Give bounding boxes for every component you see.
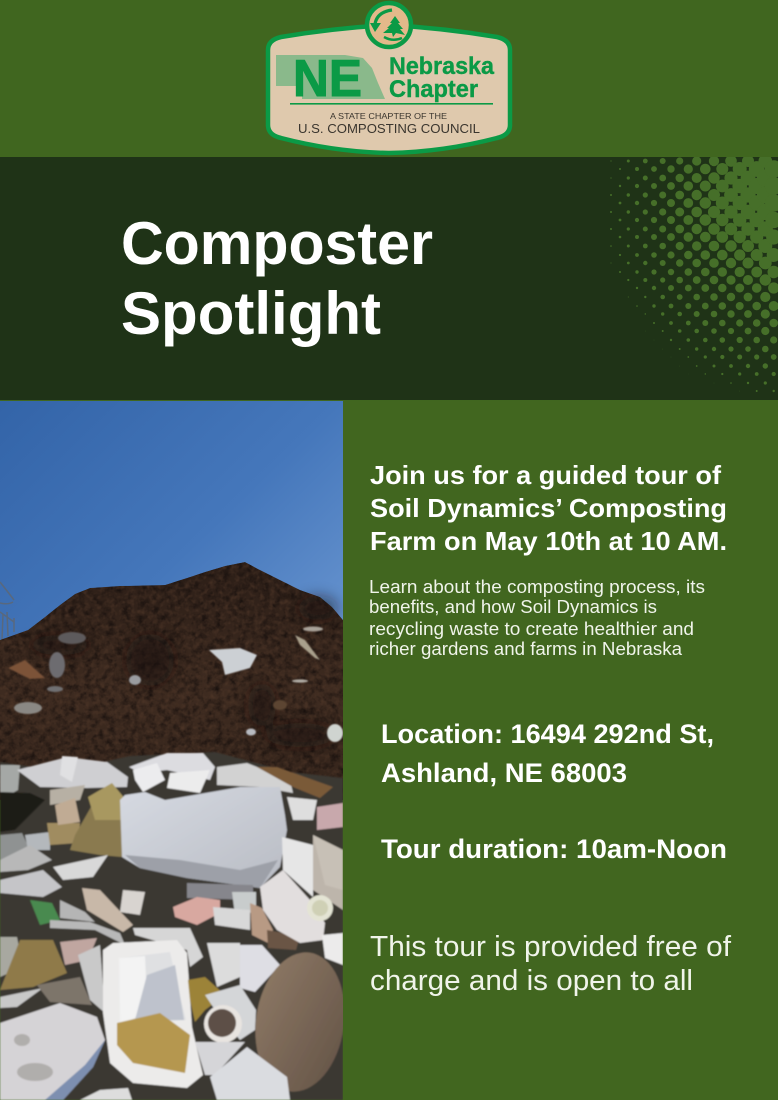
foreground bag (120, 787, 287, 888)
text: location: Ashland, NE 68003 (381, 758, 627, 788)
heading: tour invitation: Join us for a guided tour of (370, 460, 721, 490)
foam tray (103, 940, 203, 1088)
logo wordmark: Chapter (389, 76, 478, 103)
text: free admission note: This tour is provided free of (370, 931, 732, 963)
logo tagline: A STATE CHAPTER OF THE (330, 111, 447, 121)
bottom clamshell (210, 1047, 290, 1100)
text: tour description: Learn about the composting process, its (369, 577, 705, 597)
heading: tour invitation: Soil Dynamics’ Composting (370, 493, 727, 523)
title: Spotlight (121, 280, 381, 347)
logo letters NE: NE (293, 50, 362, 108)
panel: tour details (343, 401, 778, 1100)
logo wordmark: Nebraska (389, 53, 495, 80)
panel: photo of compost pile and food-service waste (0, 401, 353, 1100)
logo: Nebraska Chapter badge (268, 3, 510, 153)
heading: tour invitation (370, 460, 727, 556)
waste layer (0, 752, 353, 1100)
title (121, 210, 433, 347)
text: location: Location: 16494 292nd St, (381, 719, 714, 749)
bottom-left plate (0, 1003, 105, 1100)
large round plate (260, 870, 325, 943)
logo tagline (298, 111, 480, 136)
scraps in the mound (8, 626, 343, 742)
text: free admission note (370, 931, 732, 997)
logo tagline: U.S. COMPOSTING COUNCIL (298, 121, 480, 136)
text: tour duration: Tour duration: 10am-Noon (381, 834, 727, 864)
badge plate (268, 25, 510, 153)
dark title banner (0, 154, 778, 400)
text: tour description: recycling waste to create healthier and (369, 619, 694, 639)
bare tree (0, 582, 14, 640)
logo wordmark (389, 53, 495, 103)
waste base (0, 752, 343, 1100)
text: tour description (369, 577, 705, 659)
sky (0, 401, 343, 640)
text: tour description: richer gardens and farms in Nebraska (369, 639, 683, 659)
text: tour description: benefits, and how Soil Dynamics is (369, 597, 657, 617)
food scraps (117, 1013, 190, 1073)
cup (204, 1005, 242, 1043)
heading: tour invitation: Farm on May 10th at 10 AM. (370, 526, 727, 556)
icon: recycling arrow and tree (367, 3, 411, 47)
halftone dot pattern (610, 154, 778, 392)
compost mound (0, 562, 343, 800)
top green band (0, 0, 778, 157)
text: location (381, 719, 714, 788)
text: free admission note: charge and is open to all (370, 965, 693, 997)
state outline of Nebraska (276, 55, 385, 99)
mound shadows (30, 596, 338, 747)
title: Composter (121, 210, 433, 277)
brown cardboard disc (254, 952, 343, 1092)
